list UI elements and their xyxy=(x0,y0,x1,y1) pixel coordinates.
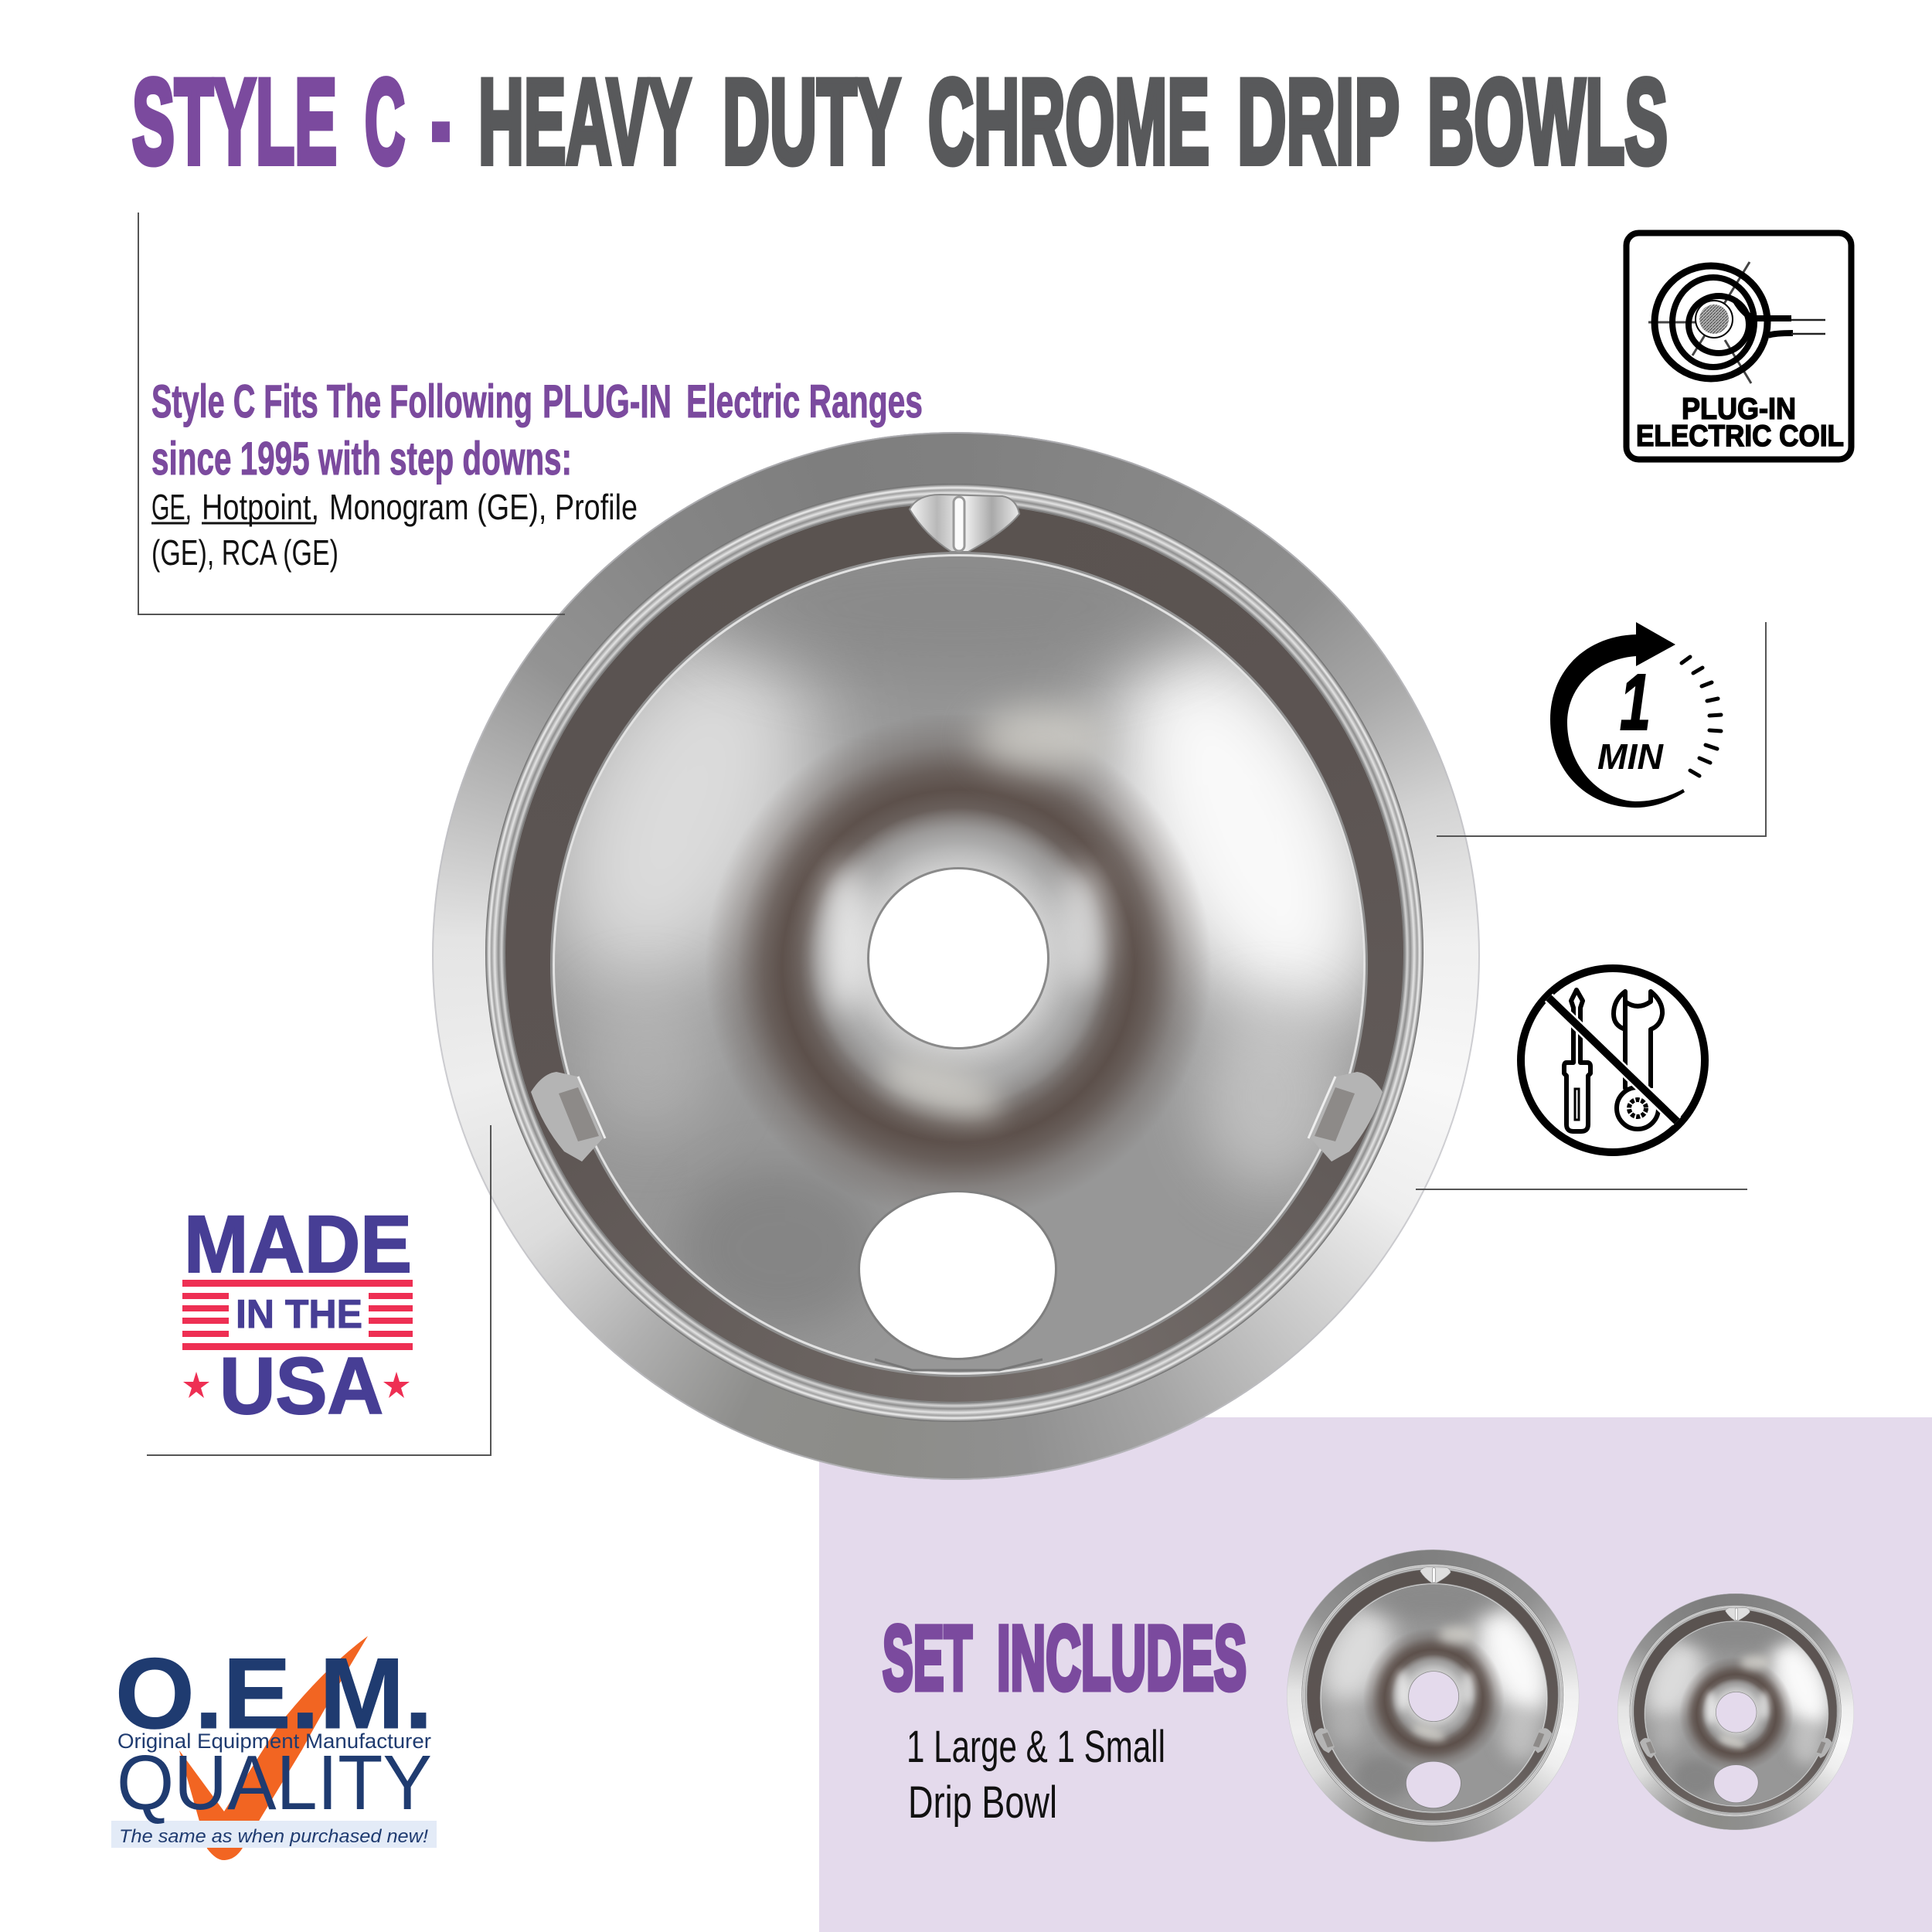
panel: set includes background xyxy=(819,1417,1932,1932)
bowl drain hole xyxy=(860,1192,1055,1358)
bowl tabs xyxy=(531,494,1383,1371)
icon label: electric coil: ELECTRIC COIL xyxy=(1636,420,1844,453)
logo strapline: The same as when purchased new! xyxy=(119,1826,428,1847)
badge: made in the usa xyxy=(182,1199,413,1431)
title xyxy=(132,55,1668,189)
heading: set includes xyxy=(883,1607,1247,1709)
compatibility heading line 1: Electric Ranges xyxy=(686,376,923,427)
bowl dark channel xyxy=(505,504,1403,1402)
photo: small drip bowl in set xyxy=(1617,1594,1854,1830)
compatibility brands line 1: GE, xyxy=(151,487,192,527)
logo tagline: Original Equipment Manufacturer xyxy=(117,1730,431,1753)
title: product name: DUTY xyxy=(723,55,900,189)
timer number: 1 xyxy=(1620,658,1651,747)
callout line: made in usa xyxy=(147,1125,491,1455)
compatibility heading line 1: Style C Fits The Following xyxy=(151,376,532,427)
badge flag stripes xyxy=(182,1280,413,1350)
brand underlines xyxy=(151,522,315,524)
callout line: one minute xyxy=(1437,622,1766,836)
badge word: usa: USA xyxy=(219,1342,383,1431)
callout line: no tools xyxy=(1416,1189,1747,1190)
title: style c: C xyxy=(365,55,405,189)
compatibility brands line 1 xyxy=(151,487,638,527)
bowl outer rim xyxy=(432,432,1480,1480)
heading: set includes: SET xyxy=(883,1607,972,1709)
icon: no tools required xyxy=(1521,968,1705,1152)
compatibility heading line 1: PLUG-IN xyxy=(543,376,672,427)
title: product name: CHROME xyxy=(928,55,1209,189)
bowl centre hole xyxy=(869,869,1047,1047)
badge word: made: MADE xyxy=(184,1199,412,1290)
logo strip xyxy=(111,1821,437,1848)
icon: plug-in electric coil xyxy=(1626,233,1852,459)
callout line: compatibility xyxy=(138,213,565,614)
compatibility brands line 2: (GE), RCA (GE) xyxy=(151,532,338,573)
photo: main chrome drip bowl xyxy=(432,432,1480,1480)
title: style c: STYLE xyxy=(132,55,337,189)
compatibility heading line 2: since 1995 with step downs: xyxy=(151,433,572,485)
text: set contents line 1: 1 Large & 1 Small xyxy=(906,1722,1165,1772)
heading: set includes: INCLUDES xyxy=(997,1607,1247,1709)
title: product name xyxy=(478,55,1668,189)
timer unit: MIN xyxy=(1597,736,1664,777)
text: set contents line 2: Drip Bowl xyxy=(908,1777,1057,1828)
logo word: o.e.m.: O.E.M. xyxy=(115,1637,433,1750)
title: product name: BOWLS xyxy=(1427,55,1668,189)
title: product name: DRIP xyxy=(1237,55,1400,189)
icon label: plug-in: PLUG-IN xyxy=(1682,393,1796,426)
badge stars xyxy=(183,1372,410,1398)
bowl inner dish xyxy=(555,556,1363,1372)
logo: o.e.m. quality xyxy=(111,1636,437,1860)
logo check mark xyxy=(179,1636,368,1860)
photo: large drip bowl in set xyxy=(1287,1549,1580,1842)
logo word: quality: QUALITY xyxy=(117,1740,432,1826)
bowl raised lip xyxy=(485,484,1423,1422)
compatibility brands line 1: Hotpoint, xyxy=(202,487,319,527)
text block: compatibility xyxy=(151,376,923,573)
compatibility brands line 1: Monogram (GE), Profile xyxy=(329,487,638,527)
title: product name: HEAVY xyxy=(478,55,691,189)
badge words: in the: IN THE xyxy=(236,1292,362,1337)
icon: one minute timer xyxy=(1550,622,1721,808)
title: - xyxy=(431,55,451,189)
